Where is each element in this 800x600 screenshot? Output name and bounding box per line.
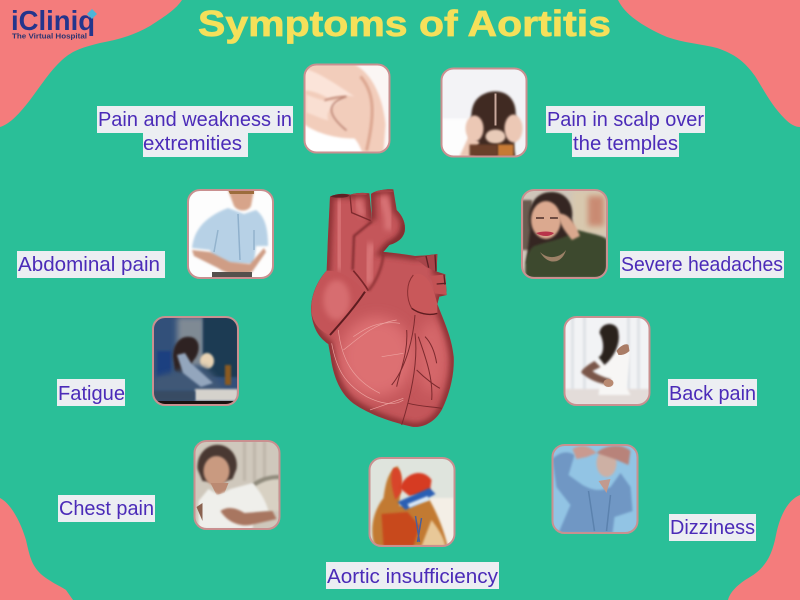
logo: The Virtual Hospital [12,32,87,40]
left atrium [429,292,438,314]
photo: back pain [564,317,650,405]
label: pain and weakness: Pain and weakness in [98,109,292,131]
logo: iCliniq [11,5,95,36]
photo: knee pain [304,64,390,152]
label: aortic insufficiency: Aortic insufficiency [327,566,498,588]
atrium outlines [330,275,437,335]
right atrium [311,270,333,334]
photo: abdominal pain [188,190,273,278]
photo: fatigue [153,317,238,405]
vessel openings [330,194,349,198]
corner blob: top right [618,0,800,127]
label: fatigue: Fatigue [58,383,125,405]
label: pain in scalp: Pain in scalp over [547,109,704,131]
corner blob: bottom right [728,495,800,600]
vessel shading [339,200,340,270]
photo: aortic insufficiency [370,458,454,546]
heart base [311,189,454,427]
label: pain in scalp [546,106,705,157]
veins light [332,320,403,410]
illustration: heart [311,189,454,427]
photo: chest pain [194,441,280,529]
title: Symptoms of Aortitis [198,3,611,44]
label: severe headaches: Severe headaches [621,254,783,276]
label: abdominal pain: Abdominal pain [18,254,160,276]
label: back pain: Back pain [669,383,756,405]
veins dark [392,315,442,425]
label: pain in scalp: the temples [573,133,678,155]
edge shading [311,189,454,427]
photo: scalp pain [442,68,526,156]
label: pain and weakness: extremities [143,133,242,155]
ventricle highlight [340,317,413,397]
vessel creases [350,195,371,221]
label: dizziness: Dizziness [670,517,755,539]
corner blob: top left [0,0,182,127]
photo: severe headaches [522,190,607,278]
label: chest pain: Chest pain [59,498,154,520]
corner blob: bottom left [0,498,73,600]
pulmonary veins [415,254,437,272]
label: pain and weakness [97,106,293,157]
photo: dizziness [552,445,638,533]
